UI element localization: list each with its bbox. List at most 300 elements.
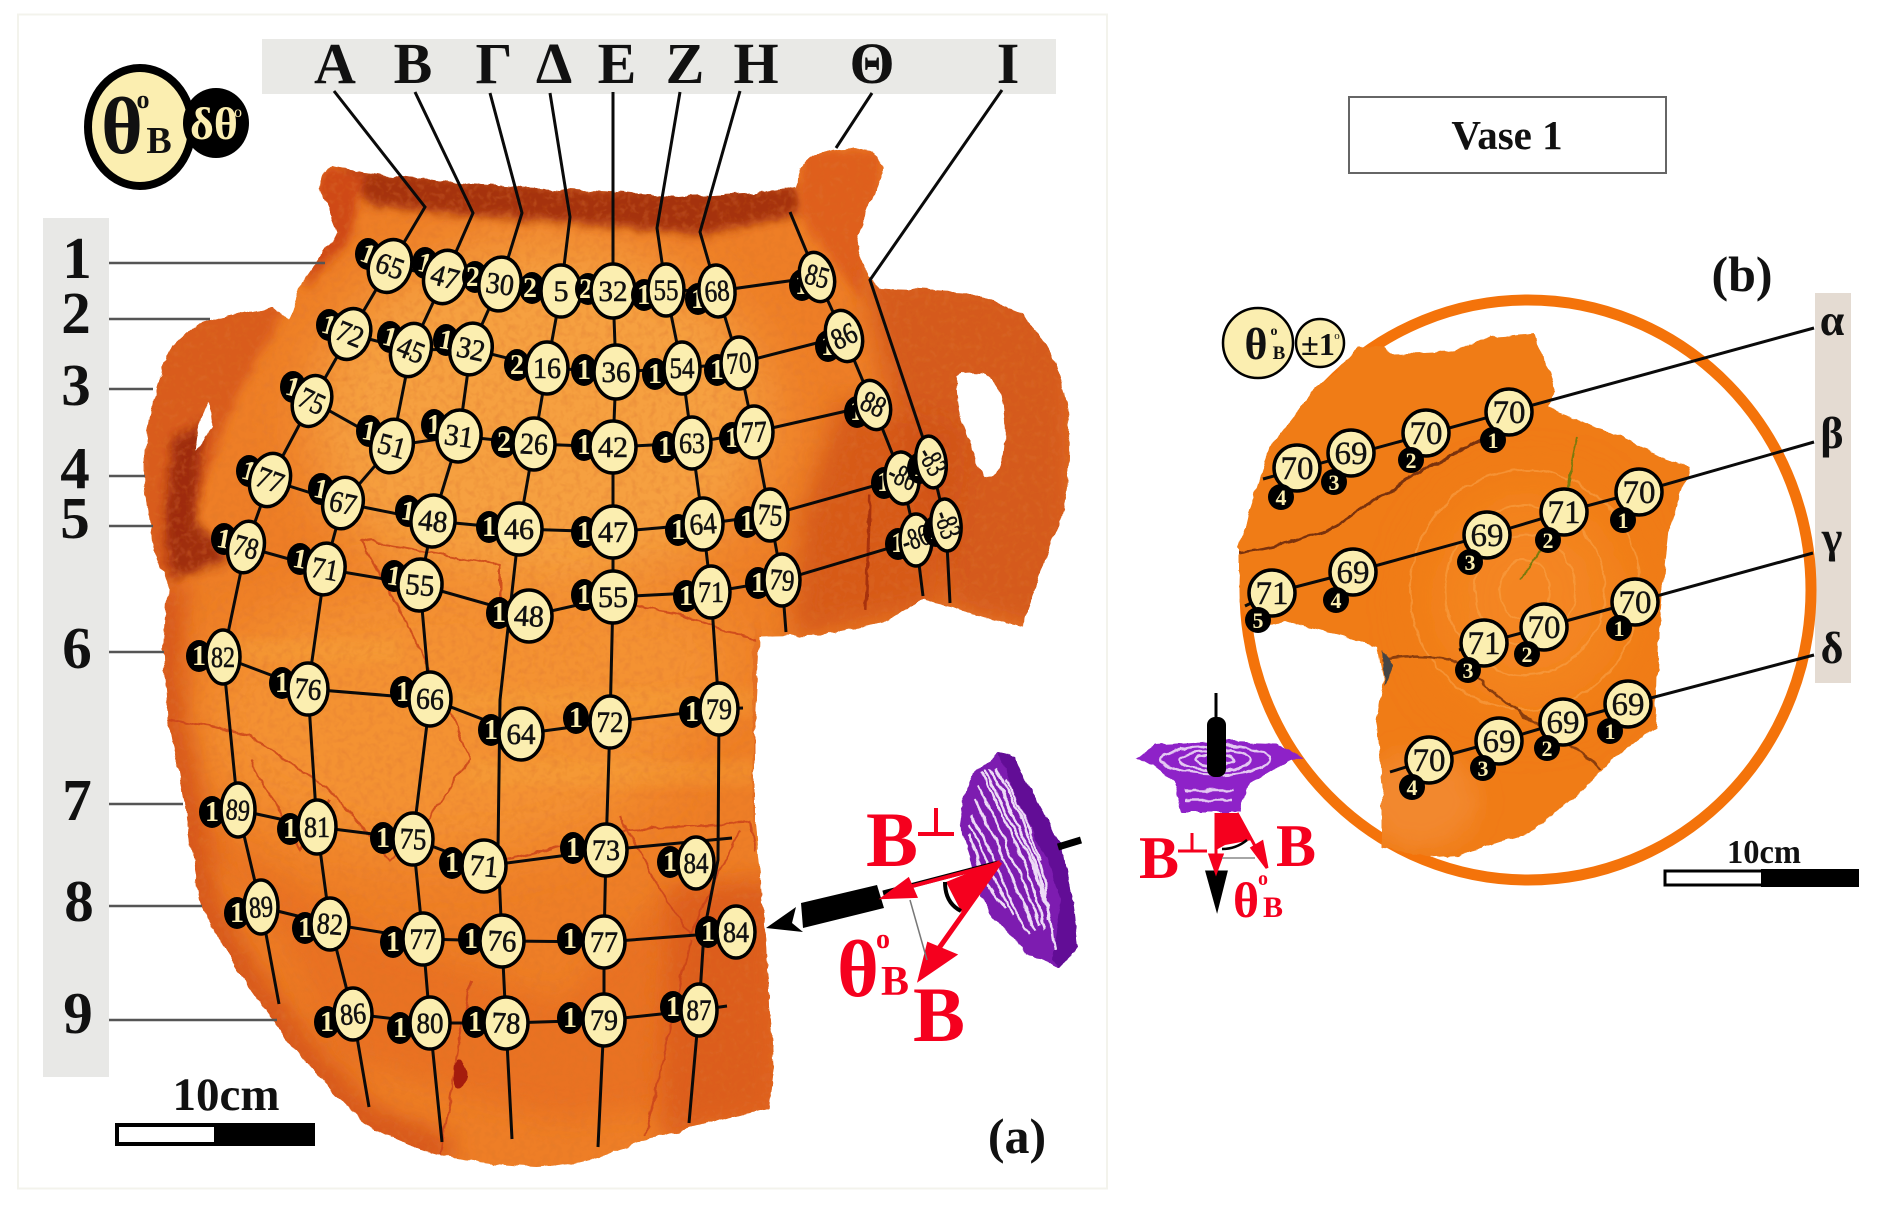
node gamma1 70	[1606, 579, 1658, 641]
node H4 75: 1	[740, 507, 754, 538]
measurement grid lines	[223, 90, 1002, 1147]
node delta2 69	[1534, 699, 1586, 761]
column letter Z: Ζ	[666, 31, 704, 96]
node alpha2 70: 2	[1406, 448, 1416, 473]
node Z6 79	[679, 683, 738, 735]
node B8 82: 82	[316, 907, 344, 942]
node H2 70: 70	[725, 346, 753, 381]
row number 9: 9	[63, 980, 93, 1046]
node B6 76: 76	[293, 672, 323, 707]
vase photograph	[130, 140, 1080, 1180]
node G5 55	[381, 557, 444, 613]
node H5 79	[745, 554, 800, 606]
node B7 81: 1	[283, 814, 297, 845]
B field arrow	[921, 862, 1000, 977]
node B9 86	[314, 988, 372, 1040]
node H2 70	[704, 337, 757, 389]
node D7 71	[439, 840, 506, 892]
node Z3 63: 63	[679, 427, 705, 460]
node gamma2 70: 2	[1522, 642, 1532, 667]
node B6 76	[269, 663, 328, 715]
node D4 46: 46	[504, 513, 534, 546]
node E3 42	[571, 421, 636, 473]
node Z9 87	[660, 984, 717, 1036]
column header bar	[262, 31, 1056, 96]
node D3 26: 2	[497, 427, 511, 458]
node G5 55: 55	[404, 568, 436, 603]
node D2 16	[504, 342, 568, 394]
node A4 77: 77	[251, 460, 288, 501]
node I5 1-83: 1	[929, 515, 943, 546]
node delta1 69: 69	[1612, 687, 1644, 723]
fragment value nodes	[1245, 389, 1662, 800]
label theta B: θ	[1233, 872, 1259, 928]
node beta2 71: 71	[1548, 495, 1580, 531]
node G4 48	[395, 493, 458, 549]
column letter Delta: Δ	[536, 31, 572, 96]
node beta5 71	[1245, 570, 1295, 633]
node G9 80	[387, 997, 450, 1049]
node A2 72: 1	[318, 309, 340, 342]
node D3 26: 26	[519, 427, 549, 462]
red wedge	[1216, 813, 1252, 850]
node I4 1-83	[907, 434, 954, 490]
node B5 71: 71	[309, 551, 341, 588]
node D8 76: 1	[464, 924, 478, 955]
node beta1 70: 1	[1618, 508, 1628, 533]
label delta: δ	[1821, 624, 1843, 673]
node E7 73: 73	[592, 834, 620, 867]
label theta B: θ	[837, 926, 879, 1014]
node E7 73	[560, 824, 627, 876]
node D9 78: 1	[468, 1007, 482, 1038]
node beta3 69	[1457, 512, 1510, 575]
node beta1 70: 70	[1622, 475, 1656, 511]
node H1 68	[685, 264, 737, 318]
base fragment photograph	[1238, 333, 1690, 857]
angle arrow	[1222, 840, 1247, 849]
label B: B	[1276, 813, 1316, 879]
node G8 77	[380, 913, 443, 965]
row number 4: 4	[60, 435, 90, 501]
node beta5 71: 5	[1252, 608, 1264, 633]
node E4 47: 47	[598, 516, 628, 549]
node Z7 84: 84	[684, 847, 708, 880]
side probe diagram	[766, 752, 1081, 1058]
node E3 42: 42	[598, 431, 628, 464]
node B4 67	[308, 473, 368, 533]
black arrow down	[1207, 850, 1226, 908]
node gamma3 71: 71	[1468, 626, 1500, 662]
node B1 47: 47	[427, 258, 463, 297]
node gamma2 70: 70	[1528, 610, 1560, 646]
node Theta1 85	[789, 248, 840, 306]
label beta: β	[1820, 409, 1844, 458]
node A8 89: 89	[248, 890, 274, 925]
node B5 71: 1	[290, 543, 309, 576]
orange ring	[1245, 300, 1811, 880]
column letter Gamma: Γ	[476, 31, 512, 96]
node E5 55: 55	[598, 581, 628, 614]
node Z7 84: 1	[663, 847, 677, 878]
node alpha1 70: 1	[1488, 428, 1498, 453]
node A4 77	[236, 449, 296, 511]
node E6 72	[563, 696, 630, 748]
node Theta5 1-86: 1	[891, 528, 905, 559]
node D6 64: 1	[484, 715, 498, 746]
node B7 81: 81	[304, 811, 330, 844]
node H4 75: 75	[756, 498, 784, 533]
node Z2 54: 1	[648, 359, 662, 390]
node B9 86: 1	[320, 1007, 334, 1038]
node A6 82: 1	[192, 641, 206, 672]
node Z2 54	[642, 342, 700, 394]
node D9 78: 78	[491, 1006, 521, 1041]
label theta B: B	[881, 959, 909, 1005]
node beta5 71: 71	[1256, 576, 1288, 612]
node G3 31: 31	[442, 418, 476, 455]
node I4 1-83: 1	[913, 452, 927, 483]
node A7 89: 89	[225, 793, 251, 828]
node Theta3 88	[844, 376, 896, 434]
node H1 68: 68	[703, 274, 731, 309]
legend: theta B with delta theta: B	[146, 120, 172, 162]
legend: theta B with delta theta: o	[136, 85, 150, 114]
node E2 36	[571, 345, 638, 399]
node D4 46	[476, 503, 542, 555]
label B perpendicular: B	[1139, 825, 1179, 891]
node D8 76: 76	[487, 924, 517, 959]
node H3 77: 77	[740, 415, 768, 450]
node Theta1 85: 85	[801, 257, 833, 296]
node Theta5 1-86: -86	[897, 518, 934, 559]
black arrow head	[766, 907, 803, 932]
node D5 48	[486, 590, 552, 642]
node D6 64: 64	[506, 718, 536, 751]
node beta4 69	[1323, 549, 1376, 613]
node E1 32	[575, 264, 635, 318]
node A2 72	[316, 303, 378, 365]
node E9 79	[557, 994, 625, 1046]
node D6 64	[478, 708, 543, 760]
node alpha4 70	[1268, 445, 1320, 510]
node Theta2 86	[815, 306, 868, 366]
node B4 67: 67	[326, 485, 360, 522]
node Z9 87: 87	[686, 994, 712, 1027]
node Z6 79: 1	[685, 697, 699, 728]
node E8 77	[557, 916, 625, 968]
node Z1 55: 1	[637, 280, 651, 311]
node B2 45: 1	[379, 321, 401, 354]
node alpha2 70: 70	[1410, 416, 1442, 452]
node delta2 69: 69	[1546, 705, 1580, 741]
legend b: theta B plus minus one: ±1	[1301, 326, 1335, 362]
node Theta3 88: 1	[850, 396, 864, 427]
node E5 55	[571, 571, 636, 623]
legend: theta B with delta theta	[88, 68, 249, 186]
node G6 66: 66	[415, 682, 445, 717]
legend b: theta B plus minus one	[1223, 308, 1344, 378]
node D4 46: 1	[482, 512, 496, 543]
fragment grid lines	[1245, 328, 1814, 772]
node D8 76	[458, 915, 524, 967]
column letter E: Ε	[598, 31, 636, 96]
node G6 66: 1	[396, 677, 410, 708]
node D2 16: 2	[510, 350, 524, 381]
label alpha: α	[1820, 296, 1845, 345]
node beta2 71	[1535, 489, 1587, 553]
node E4 47: 1	[577, 517, 591, 548]
node E4 47	[571, 506, 636, 558]
node B5 71	[287, 540, 348, 598]
node G3 31: 1	[427, 410, 441, 441]
node G1 30: 30	[484, 266, 516, 303]
node Z6 79: 79	[706, 693, 732, 726]
row number 7: 7	[62, 767, 92, 833]
node delta4 70: 70	[1412, 743, 1446, 779]
node E2 36: 1	[577, 355, 591, 386]
node Z4 64: 1	[671, 515, 685, 546]
label theta B	[837, 924, 909, 1014]
node Theta4 1-86: -86	[883, 456, 922, 498]
node B3 51: 51	[374, 427, 410, 466]
node delta4 70	[1399, 737, 1452, 800]
node alpha1 70: 70	[1492, 395, 1526, 431]
node A3 75	[280, 370, 338, 432]
node B2 45	[377, 319, 437, 381]
node Theta1 85: 1	[795, 270, 809, 301]
node H5 79: 1	[751, 568, 765, 599]
legend b: theta B plus minus one: B	[1273, 343, 1286, 364]
label B perpendicular: B	[866, 796, 918, 883]
base section purple	[1137, 741, 1304, 812]
node D1 5	[519, 265, 581, 317]
node G3 31	[421, 407, 484, 465]
node Theta2 86: 1	[821, 331, 835, 362]
node A2 72: 72	[331, 314, 369, 355]
node alpha3 69: 3	[1328, 470, 1340, 495]
node I4 1-83: -83	[911, 441, 954, 482]
node B8 82	[292, 898, 349, 950]
node A3 75: 75	[293, 381, 331, 422]
node beta2 71: 2	[1542, 528, 1554, 553]
node D5 48: 1	[492, 598, 506, 629]
node G7 75: 1	[376, 823, 390, 854]
node B7 81	[277, 800, 336, 854]
node Z3 63: 1	[658, 432, 672, 463]
title box: Vase 1	[1451, 112, 1563, 158]
node A1 65: 65	[371, 246, 409, 287]
node G4 48: 1	[399, 495, 417, 528]
node A7 89: 1	[205, 797, 219, 828]
node Z8 84: 1	[701, 917, 715, 948]
node beta1 70	[1610, 469, 1662, 533]
node H1 68: 1	[691, 284, 705, 315]
node G2 32: 32	[454, 330, 488, 369]
legend: theta B with delta theta: o	[234, 104, 242, 121]
node gamma1 70: 70	[1618, 585, 1652, 621]
row number 6: 6	[62, 615, 92, 681]
node E8 77: 77	[590, 926, 618, 959]
node Z7 84	[657, 837, 714, 889]
label theta B: o	[1258, 868, 1268, 890]
node G9 80: 1	[393, 1013, 407, 1044]
node D5 48: 48	[513, 599, 545, 634]
legend b: theta B plus minus one: θ	[1245, 320, 1267, 369]
node Z5 71: 1	[679, 581, 693, 612]
node A1 65	[355, 233, 419, 299]
sherd section purple	[960, 752, 1078, 967]
node B3 51	[356, 415, 418, 477]
node delta4 70: 4	[1406, 775, 1418, 800]
node A6 82	[186, 630, 240, 684]
node A5 78: 78	[230, 528, 262, 567]
column letter H: Η	[733, 31, 779, 96]
bottom probe diagram	[1137, 693, 1316, 928]
node Z4 64	[665, 498, 723, 550]
node alpha4 70: 4	[1276, 485, 1286, 510]
node B6 76: 1	[275, 668, 289, 699]
node D3 26	[491, 418, 555, 470]
node Theta4 1-86: 1	[877, 467, 891, 498]
node alpha3 69: 69	[1334, 436, 1368, 472]
column letter I: Ι	[997, 31, 1019, 96]
node delta3 69	[1470, 718, 1522, 781]
scale bar a: 10cm	[172, 1069, 280, 1121]
node G2 32: 1	[436, 324, 455, 357]
node G9 80: 80	[416, 1007, 444, 1040]
node D1 5: 2	[523, 273, 537, 304]
node G6 66	[390, 672, 451, 726]
node D7 71: 1	[445, 848, 459, 879]
node G7 75: 75	[399, 822, 427, 857]
scale bar b: 10cm	[1727, 834, 1801, 871]
node E1 32: 32	[598, 275, 628, 308]
node I5 1-83: -83	[927, 506, 968, 543]
label theta B	[1233, 868, 1283, 928]
node Z3 63	[652, 417, 711, 469]
node B8 82: 1	[298, 913, 312, 944]
node Z2 54: 54	[670, 352, 694, 385]
node G2 32	[433, 319, 497, 379]
node B4 67: 1	[311, 473, 331, 506]
node B1 47	[412, 245, 472, 309]
node Theta3 88: 88	[855, 385, 891, 425]
row leader lines	[109, 263, 325, 1020]
projection line	[1222, 857, 1255, 859]
node beta3 69: 3	[1464, 550, 1476, 575]
node E6 72: 72	[596, 706, 624, 739]
node Z1 55	[631, 264, 684, 316]
node H2 70: 1	[710, 355, 724, 386]
node A3 75: 1	[282, 371, 304, 404]
probe body	[1207, 717, 1226, 777]
node Z1 55: 55	[654, 274, 678, 307]
scale bar a	[117, 1069, 315, 1146]
label B perpendicular	[1139, 825, 1207, 891]
node Z5 71	[673, 566, 730, 618]
row number 5: 5	[60, 485, 90, 551]
row number 2: 2	[61, 280, 91, 346]
legend b: theta B plus minus one: o	[1270, 324, 1278, 339]
perpendicular field arrow	[885, 863, 1000, 897]
node G1 30	[462, 254, 525, 314]
node H3 77	[719, 406, 773, 458]
node beta4 69: 4	[1330, 588, 1342, 613]
node G8 77: 1	[386, 927, 400, 958]
node G4 48: 48	[417, 504, 449, 539]
projection line	[910, 900, 927, 960]
scale bar b	[1665, 834, 1859, 887]
node delta3 69: 3	[1478, 756, 1488, 781]
title box	[1349, 97, 1666, 173]
probe rod	[1058, 840, 1081, 847]
node Z5 71: 71	[698, 576, 724, 609]
node A7 89	[199, 783, 255, 837]
node alpha4 70: 70	[1280, 451, 1314, 487]
panel label b: (b)	[1711, 246, 1773, 302]
node Theta5 1-86	[885, 514, 934, 566]
node delta2 69: 2	[1542, 736, 1552, 761]
node E2 36: 36	[602, 356, 630, 389]
node gamma3 71	[1455, 620, 1507, 683]
probe body	[801, 885, 884, 928]
legend: theta B with delta theta: θ	[101, 83, 143, 171]
label B: B	[913, 971, 965, 1058]
row number 3: 3	[61, 352, 91, 418]
panel a frame	[18, 14, 1107, 1188]
label theta B: o	[876, 924, 890, 955]
node D7 71: 71	[468, 849, 500, 884]
greek row bar	[1815, 293, 1851, 683]
node G8 77: 77	[410, 923, 436, 956]
column letter A: Α	[314, 31, 356, 96]
node A6 82: 82	[211, 641, 235, 674]
node B3 51: 1	[359, 415, 378, 448]
node gamma2 70	[1514, 604, 1567, 667]
node D2 16: 16	[533, 352, 561, 385]
panel label a: (a)	[988, 1108, 1046, 1164]
value nodes on vase	[186, 233, 968, 1049]
left handle opening	[195, 403, 212, 452]
node E8 77: 1	[563, 924, 577, 955]
node alpha2 70	[1398, 410, 1449, 473]
node delta1 69	[1597, 681, 1651, 744]
node E6 72: 1	[569, 703, 583, 734]
node A8 89: 1	[230, 898, 244, 929]
node alpha3 69	[1321, 430, 1374, 495]
label gamma: γ	[1821, 513, 1842, 562]
node beta4 69: 69	[1336, 555, 1370, 591]
node E7 73: 1	[566, 833, 580, 864]
node D9 78	[462, 997, 528, 1049]
red angle wedge	[946, 860, 1000, 913]
angle arrow	[945, 882, 961, 911]
node B2 45: 45	[392, 330, 430, 371]
node G5 55: 1	[385, 560, 403, 593]
row number 8: 8	[64, 868, 94, 934]
node B1 47: 1	[415, 247, 435, 280]
node Theta4 1-86	[871, 451, 922, 505]
column letter Theta: Θ	[849, 31, 895, 96]
node I5 1-83	[923, 498, 968, 552]
node Z8 84	[695, 906, 755, 958]
node Z4 64: 64	[688, 507, 718, 542]
node E3 42: 1	[577, 430, 591, 461]
red arrows	[1210, 813, 1267, 872]
node E1 32: 2	[579, 274, 593, 305]
node alpha1 70	[1480, 389, 1532, 453]
